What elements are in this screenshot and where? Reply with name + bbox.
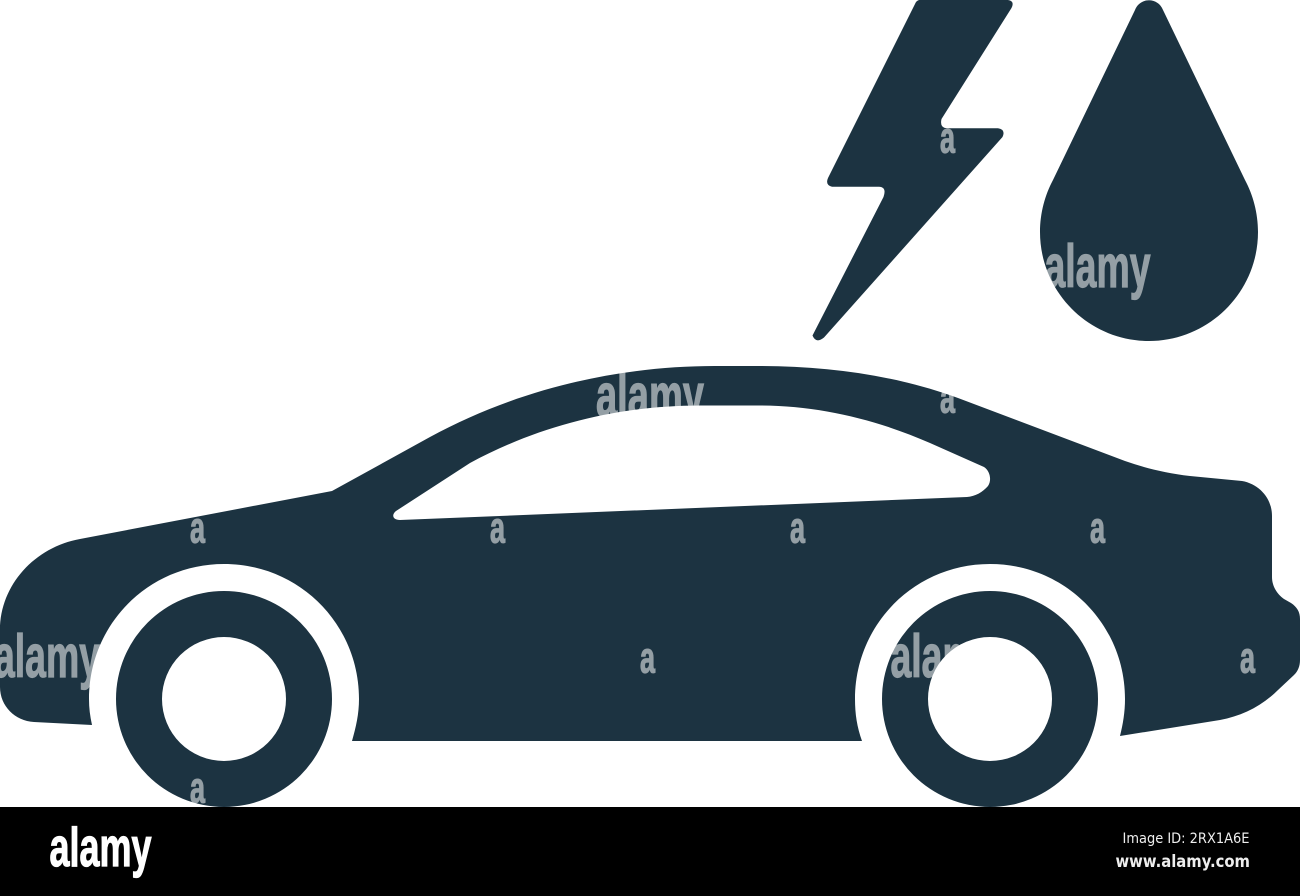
watermark: a [190,504,205,552]
watermark: alamy [1044,233,1151,300]
watermark: a [940,114,955,162]
rear wheel [882,591,1098,807]
image id: Image ID: 2RX1A6E [1122,831,1250,847]
watermark: a [790,504,805,552]
footer bar [0,807,1300,896]
alamy logo: alamy [50,816,152,878]
watermark: alamy [890,623,997,690]
icon: water drop [1040,0,1258,341]
watermark: a [1090,504,1105,552]
watermark [0,114,1255,812]
watermark: a [940,374,955,422]
watermark: alamy [596,362,704,429]
icon: lightning bolt [812,0,1013,340]
watermark: a [190,764,205,812]
icon: car [0,366,1300,807]
front wheel [116,591,332,807]
site url: www.alamy.com [1116,852,1250,871]
watermark: a [1240,634,1255,682]
watermark: a [490,504,505,552]
watermark: a [640,634,655,682]
car body [0,366,1300,741]
